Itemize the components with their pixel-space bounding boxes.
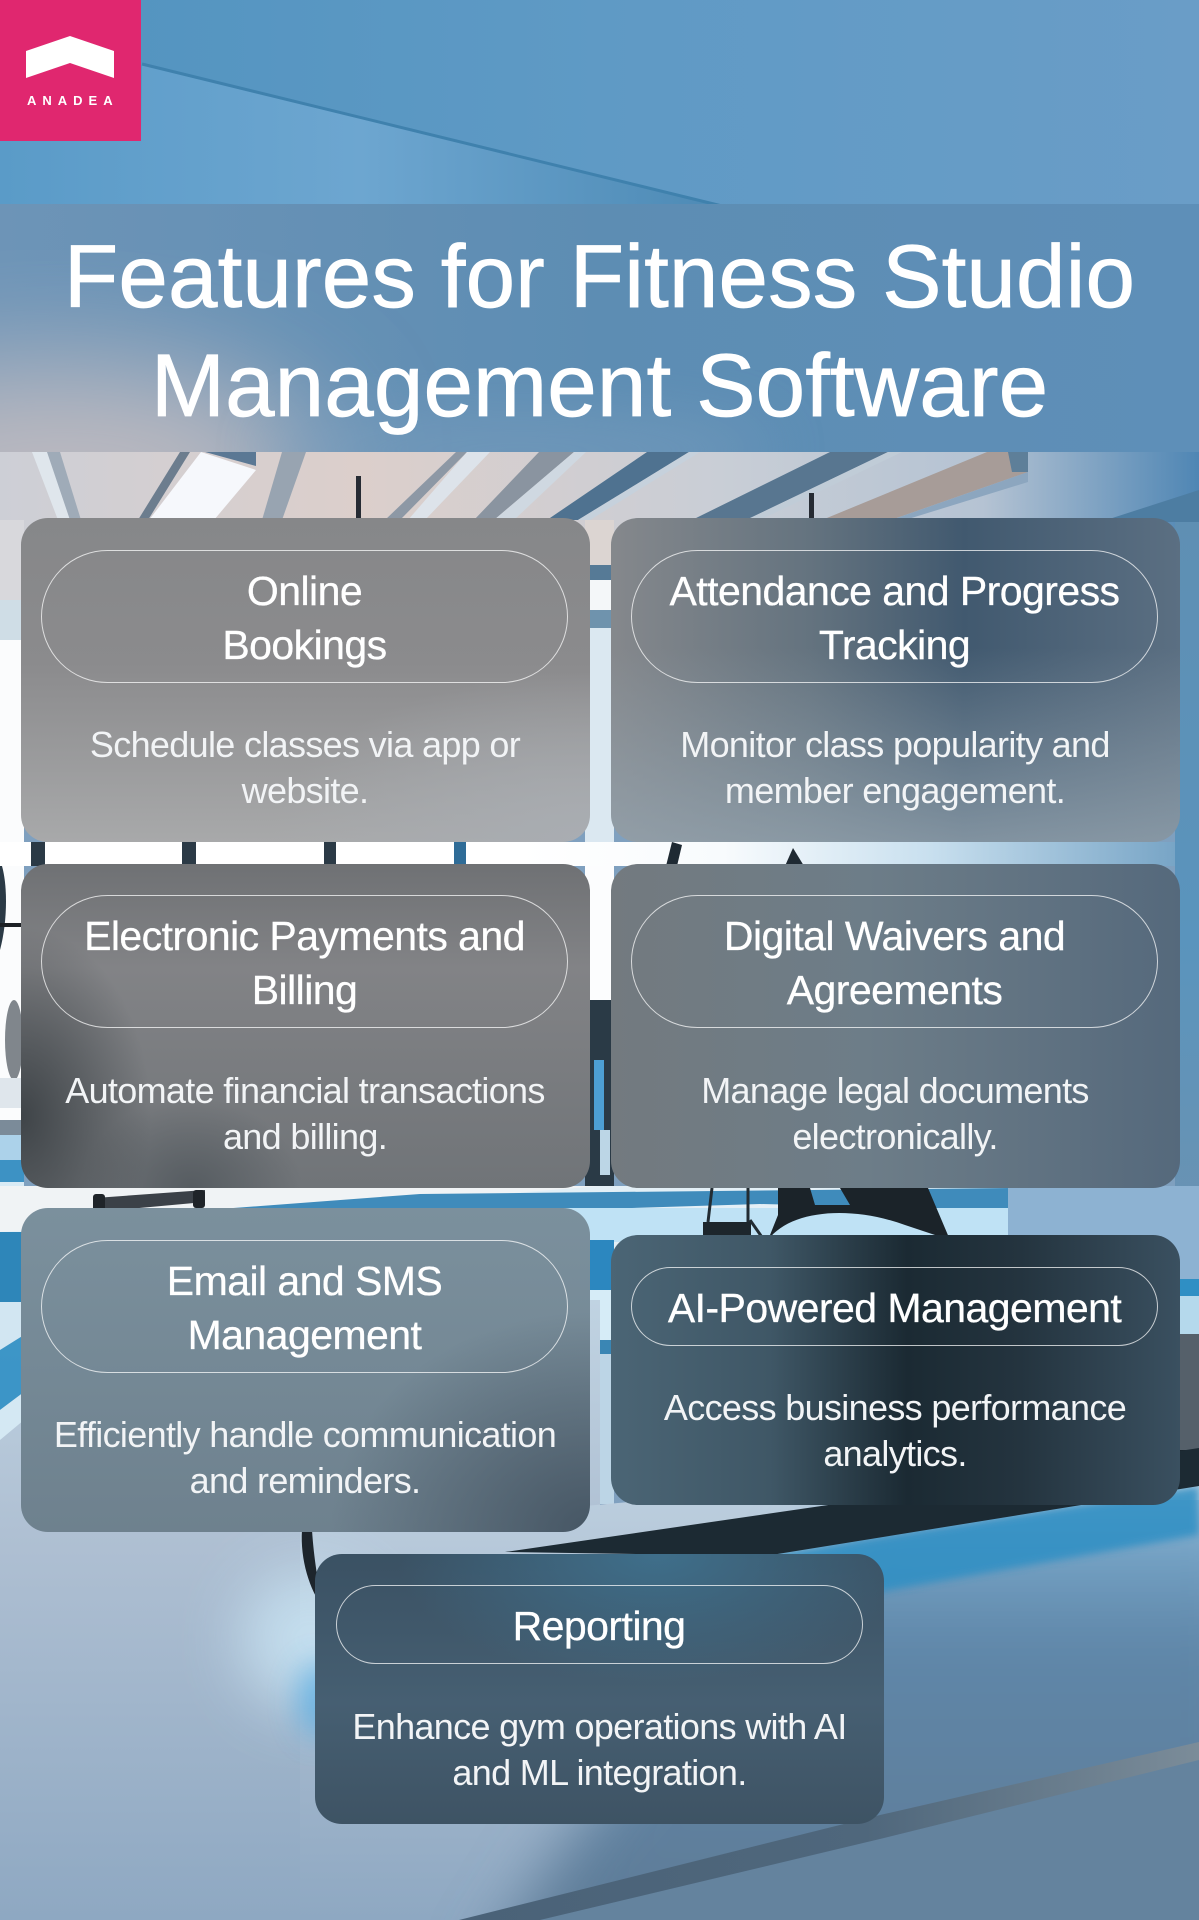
heading: Billing bbox=[252, 967, 357, 1013]
heading: Attendance and Progress bbox=[669, 568, 1120, 614]
heading: Tracking bbox=[819, 622, 970, 668]
description bbox=[701, 1070, 1089, 1156]
description bbox=[90, 724, 520, 811]
heading: Agreements bbox=[787, 967, 1002, 1013]
description: Efficiently handle communication bbox=[54, 1414, 556, 1455]
title: Features for Fitness Studio bbox=[64, 226, 1135, 326]
heading: Digital Waivers and bbox=[724, 913, 1065, 959]
heading: Electronic Payments and bbox=[84, 913, 525, 959]
panel: digital waivers and agreements bbox=[610, 864, 1180, 1188]
heading bbox=[631, 895, 1158, 1028]
panel: reporting bbox=[315, 1554, 884, 1824]
heading bbox=[41, 895, 568, 1028]
heading bbox=[336, 1585, 862, 1664]
description bbox=[65, 1070, 545, 1156]
heading bbox=[41, 550, 568, 682]
logo: Anadea bbox=[0, 0, 141, 141]
right margin wall bbox=[1175, 522, 1199, 1280]
description: member engagement. bbox=[725, 770, 1065, 811]
left margin scene bbox=[0, 520, 24, 1232]
icon: white chevron bbox=[26, 36, 114, 78]
title bbox=[64, 226, 1135, 435]
panel: email and sms management bbox=[20, 1208, 590, 1532]
description: electronically. bbox=[792, 1116, 998, 1156]
description: Manage legal documents bbox=[701, 1070, 1089, 1110]
description: and reminders. bbox=[190, 1460, 420, 1501]
top sky-like ceiling bbox=[0, 0, 1199, 210]
description: and ML integration. bbox=[452, 1752, 747, 1792]
description bbox=[680, 724, 1110, 811]
heading bbox=[41, 1240, 568, 1372]
heading bbox=[631, 1266, 1158, 1346]
logo wordmark: ANADEA bbox=[27, 93, 119, 108]
description: analytics. bbox=[823, 1433, 967, 1474]
description: Access business performance bbox=[664, 1387, 1126, 1428]
ceiling with beams bbox=[0, 452, 1199, 542]
panel: ai-powered management bbox=[610, 1235, 1180, 1505]
title: Management Software bbox=[151, 335, 1048, 435]
panel: attendance and progress tracking bbox=[610, 518, 1180, 842]
gutter window and posts between the top cards bbox=[0, 842, 1199, 866]
description: website. bbox=[242, 770, 368, 811]
lower floor bbox=[0, 1232, 1199, 1920]
heading: Email and SMS bbox=[167, 1258, 442, 1304]
heading: Management bbox=[188, 1312, 421, 1358]
description: Monitor class popularity and bbox=[680, 724, 1110, 765]
center gutter scene bbox=[585, 520, 614, 1190]
title band bbox=[0, 204, 1199, 452]
description bbox=[54, 1414, 556, 1501]
mid floor with blue light strip bbox=[0, 1186, 1199, 1504]
heading: AI-Powered Management bbox=[668, 1284, 1121, 1330]
description: Enhance gym operations with AI bbox=[352, 1706, 847, 1746]
heading: Bookings bbox=[222, 622, 387, 668]
right side bands behind AI card bbox=[1175, 1279, 1199, 1486]
description: Schedule classes via app or bbox=[90, 724, 520, 765]
heading bbox=[631, 550, 1158, 682]
heading: Online bbox=[247, 568, 362, 614]
panel: online bookings bbox=[20, 518, 590, 842]
heading: Reporting bbox=[513, 1603, 685, 1649]
description: and billing. bbox=[223, 1116, 387, 1156]
panel: electronic payments and billing bbox=[20, 864, 590, 1188]
description bbox=[664, 1387, 1126, 1474]
description bbox=[352, 1706, 847, 1792]
description: Automate financial transactions bbox=[65, 1070, 545, 1110]
